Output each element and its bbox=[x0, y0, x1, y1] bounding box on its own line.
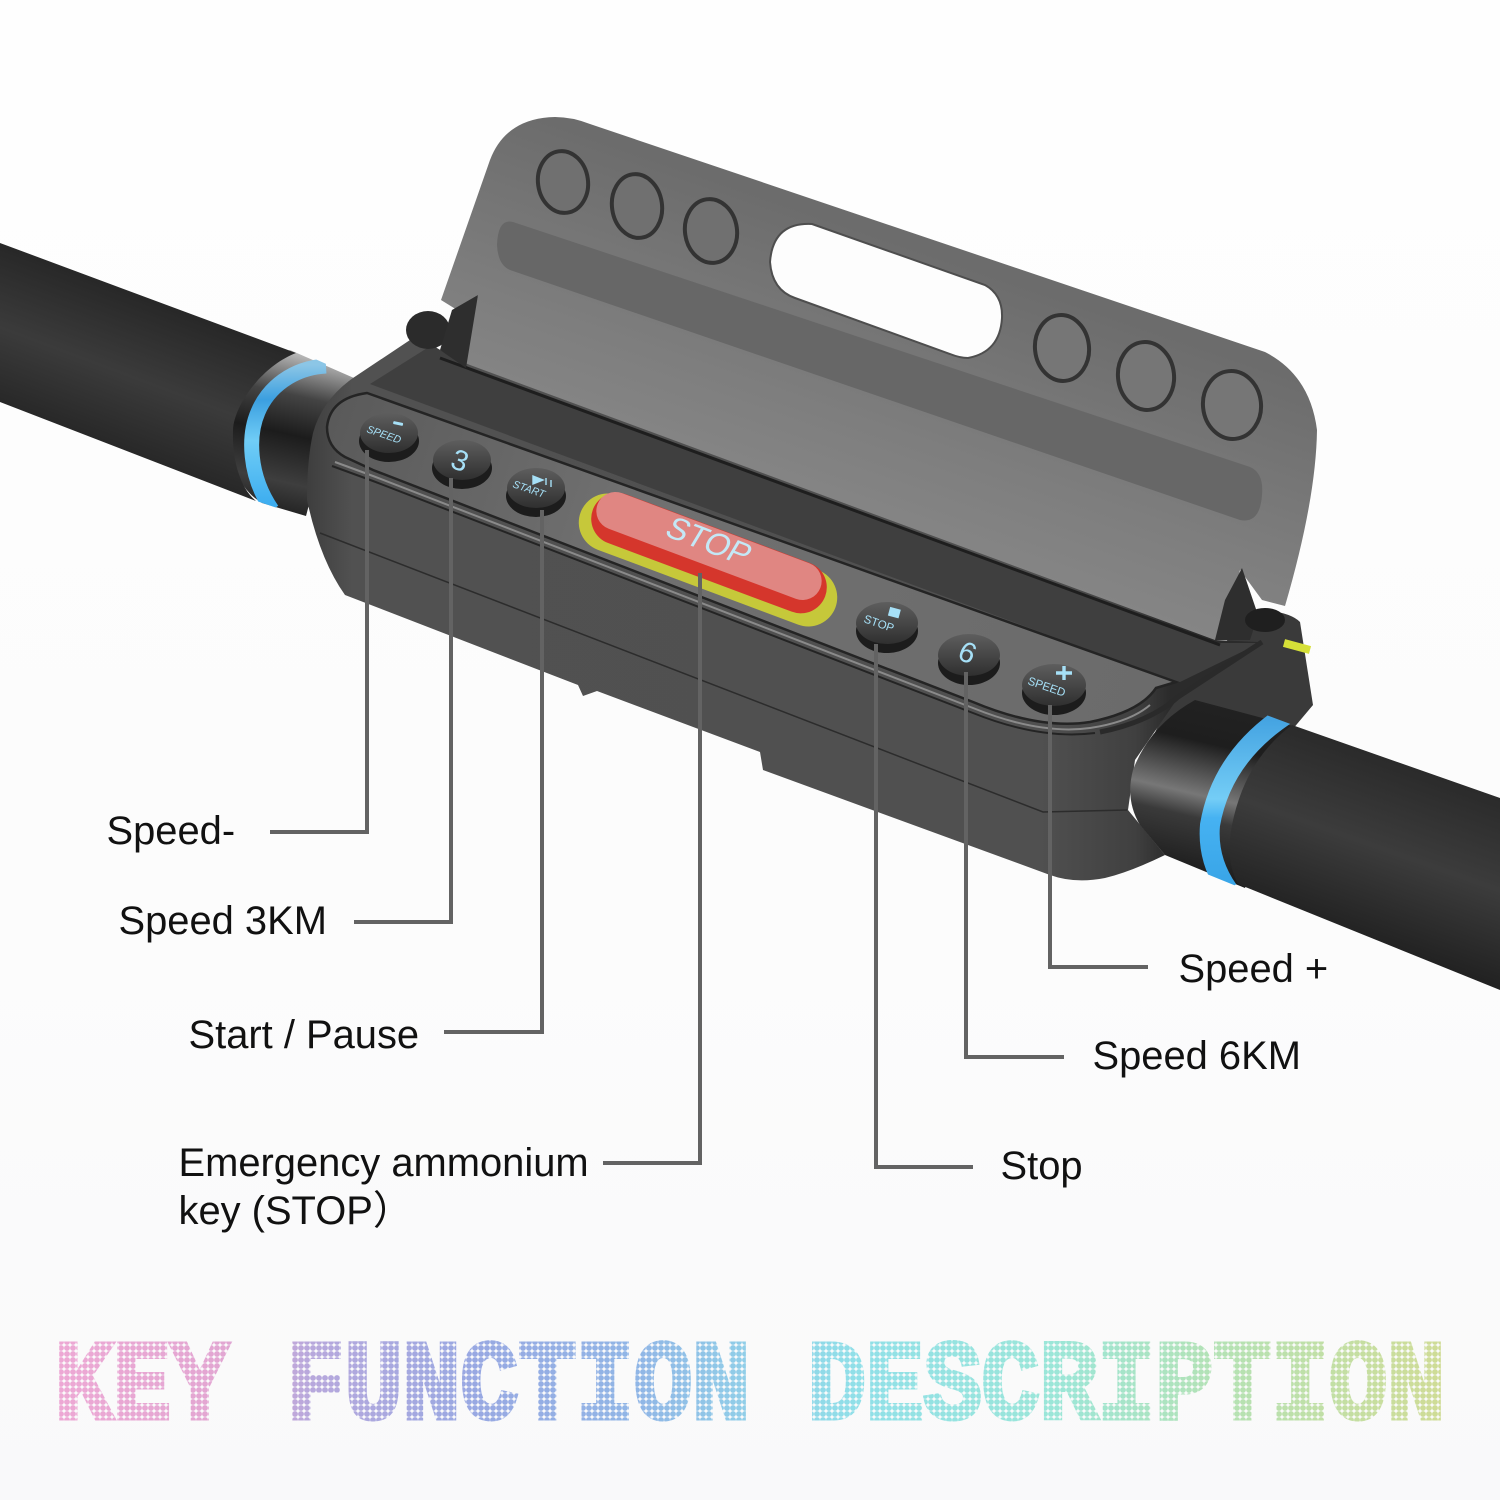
yellow indicator pin bbox=[1284, 643, 1310, 650]
lid hand-hold opening bbox=[770, 224, 1002, 358]
tray well behind buttons bbox=[370, 345, 1260, 683]
left hinge bbox=[406, 295, 478, 368]
callout: Stop: Stop bbox=[1000, 1144, 1083, 1188]
callout: Stop bbox=[876, 644, 1083, 1188]
callout: Emergency key: key (STOP） bbox=[178, 1189, 413, 1233]
button: speed minus bbox=[359, 413, 419, 462]
right blue ring bbox=[1210, 712, 1290, 890]
callout: Speed-: Speed- bbox=[106, 809, 235, 853]
button: speed 3 bbox=[432, 440, 492, 489]
red emergency stop button: STOP bbox=[659, 510, 759, 572]
callout: Speed +: Speed + bbox=[1178, 947, 1328, 991]
right hinge bbox=[1215, 568, 1285, 640]
phone holder lid bbox=[441, 117, 1317, 642]
callout: Emergency key: Emergency ammonium bbox=[178, 1141, 589, 1185]
callout: Speed + bbox=[1050, 705, 1328, 991]
housing seam bbox=[320, 533, 1127, 812]
callout: Speed 6KM bbox=[966, 672, 1301, 1078]
button: speed 3: 3 bbox=[447, 444, 473, 479]
callout: Speed 3KM bbox=[118, 478, 451, 943]
control housing body bbox=[307, 340, 1258, 880]
button plate bbox=[327, 393, 1176, 724]
callout: Start / Pause bbox=[188, 510, 542, 1057]
lid base shadow line bbox=[440, 358, 1220, 645]
product: treadmill handlebar control unit bbox=[0, 117, 1500, 990]
button: speed 6: 6 bbox=[953, 635, 981, 671]
button: speed plus bbox=[1022, 664, 1086, 715]
button: stop: STOP bbox=[862, 613, 896, 635]
red emergency stop button bbox=[570, 485, 846, 635]
button: stop bbox=[856, 602, 918, 653]
left blue ring bbox=[252, 366, 326, 510]
button: speed 6 bbox=[938, 634, 1000, 685]
callout: Speed 3KM: Speed 3KM bbox=[118, 899, 327, 943]
chamfer highlight right bbox=[1100, 642, 1262, 732]
right rear housing bbox=[1140, 610, 1313, 765]
right handlebar grip bbox=[1230, 725, 1500, 990]
lid recessed strip bbox=[497, 221, 1262, 520]
lid round recesses, right group bbox=[1032, 312, 1264, 442]
left handlebar grip bbox=[0, 243, 296, 501]
right collar bbox=[1130, 700, 1300, 888]
callout: Emergency key bbox=[178, 573, 700, 1233]
lid round recesses, left group bbox=[534, 148, 741, 266]
callout: Speed- bbox=[106, 450, 367, 853]
button: start pause bbox=[506, 468, 566, 517]
plate front edge lines bbox=[332, 462, 1150, 734]
button: speed plus: SPEED bbox=[1026, 675, 1067, 700]
callout: Speed 6KM: Speed 6KM bbox=[1092, 1034, 1301, 1078]
callout: Start / Pause: Start / Pause bbox=[188, 1013, 419, 1057]
left collar bbox=[230, 350, 354, 516]
button: speed minus: SPEED bbox=[365, 423, 403, 447]
button: start pause: START bbox=[511, 478, 548, 501]
